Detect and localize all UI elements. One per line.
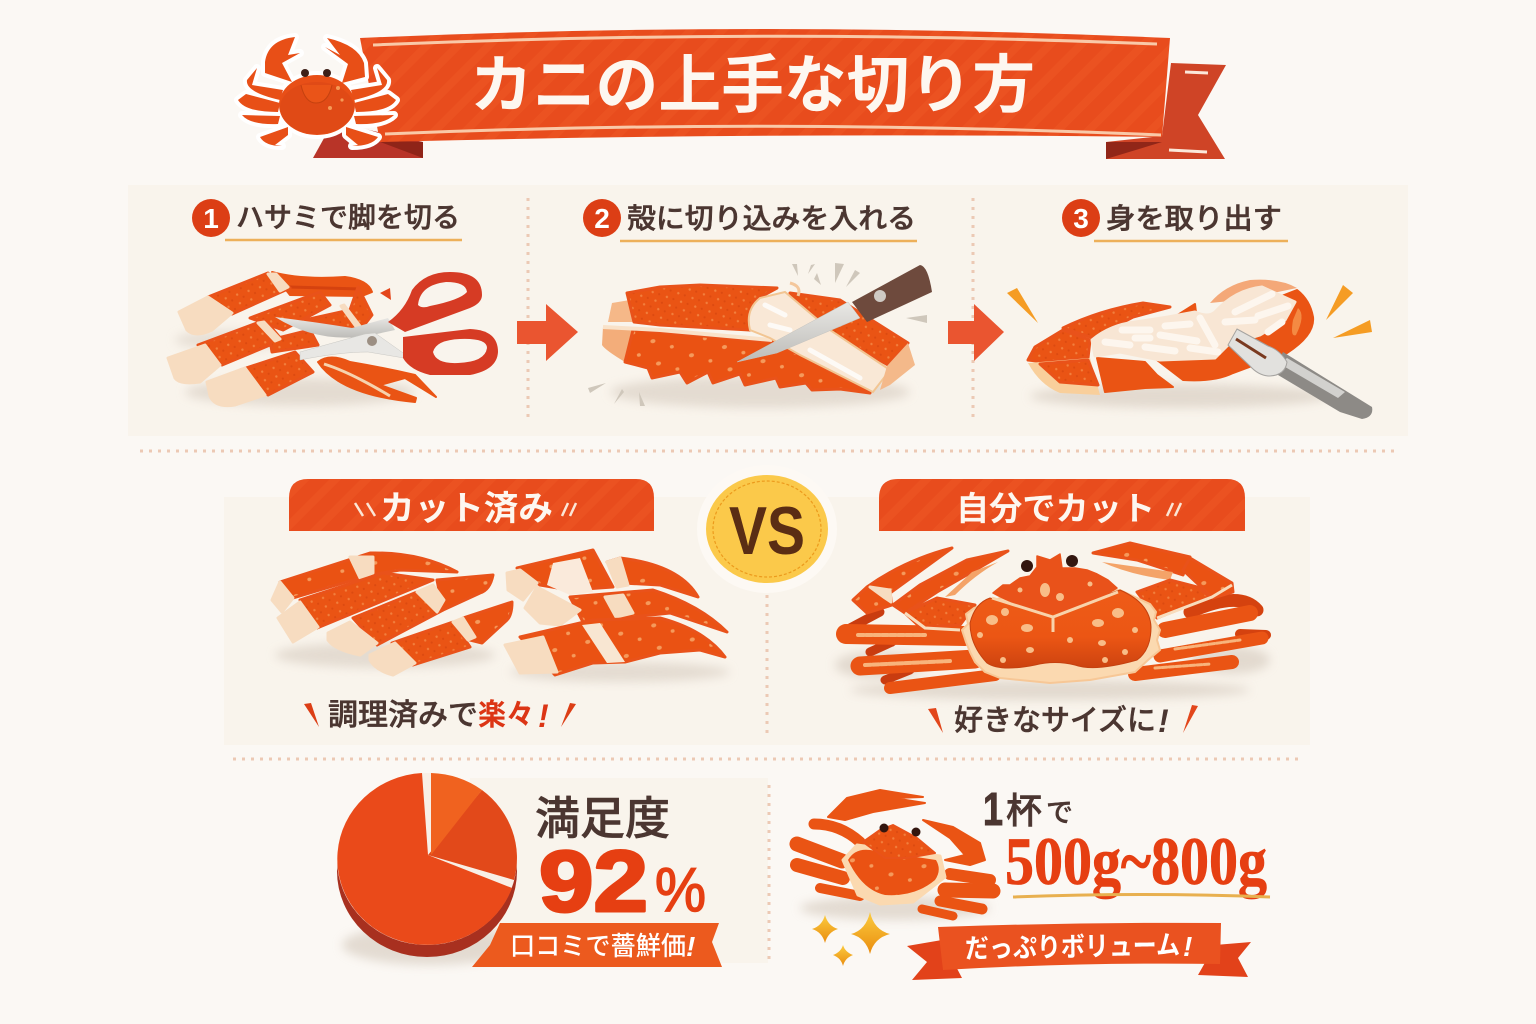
step 3 heading: 3 (1073, 203, 1089, 234)
title text: カニの上手な切り方 (470, 51, 1035, 121)
crab shell (962, 554, 1160, 683)
banner tail: left (313, 122, 423, 158)
panel: satisfaction stat (337, 773, 769, 967)
pie chart (337, 773, 518, 965)
ribbon: volume (907, 923, 1251, 980)
ribbon: reviews: 口コミで薔鮮価 (510, 931, 686, 961)
small crab body (843, 824, 945, 904)
VS badge (697, 465, 837, 593)
cut crab legs (168, 272, 436, 406)
per-crab label (983, 783, 1073, 835)
step 1 heading: ハサミで脚を切る (236, 202, 460, 233)
per-crab label: 杯 (1006, 790, 1042, 831)
satisfaction value (539, 834, 706, 930)
caption: pre-cut: 調理済みで (328, 699, 478, 732)
fork (1228, 329, 1372, 419)
header: pre-cut: カット済み (380, 490, 553, 528)
caption: pre-cut: 楽々 (478, 699, 534, 732)
illustration: cut legs (272, 550, 730, 682)
illustration: whole crab (835, 543, 1270, 700)
scored crab leg (602, 283, 915, 393)
arrow 1 (517, 304, 578, 361)
satisfaction value: % (655, 856, 706, 925)
per-crab label: で (1046, 798, 1073, 828)
panel: three steps (128, 185, 1408, 436)
caption: cut it yourself: 好きなサイズに (954, 704, 1156, 737)
panel: comparison (224, 465, 1310, 745)
scissors (275, 272, 498, 375)
header: pre-cut (289, 479, 654, 531)
ribbon: reviews: ! (686, 931, 695, 962)
step 3 heading (1062, 199, 1288, 241)
step 1 illustration: legs and scissors (168, 272, 498, 406)
impact marks (588, 263, 927, 406)
per-crab label: 1 (983, 783, 1003, 835)
icon: header crab (238, 37, 396, 146)
step 2 illustration: leg and knife (588, 263, 932, 408)
stat: volume per crab (907, 783, 1270, 980)
step 3 heading: 身を取り出す (1106, 203, 1282, 234)
step 2 heading: 殻に切り込みを入れる (627, 203, 916, 234)
banner ribbon (360, 29, 1170, 142)
arrow 2 (948, 304, 1004, 361)
caption: cut it yourself (928, 703, 1198, 739)
step 1 heading (192, 199, 462, 240)
satisfaction value: 92 (539, 834, 648, 930)
knife (737, 265, 932, 362)
ribbon: volume: ! (1183, 931, 1192, 962)
banner tail: right (1106, 63, 1226, 159)
header: cut it yourself (879, 479, 1245, 531)
title banner (313, 29, 1226, 159)
banner highlights (373, 36, 1161, 135)
caption: cut it yourself: ! (1158, 703, 1169, 739)
step 3 illustration: claw meat and fork (1007, 280, 1372, 419)
sparkle marks (1007, 285, 1372, 338)
sparkles (812, 912, 890, 966)
left group of legs (272, 553, 512, 675)
header: cut it yourself: 自分でカット (956, 490, 1155, 527)
satisfaction label: 満足度 (535, 793, 670, 844)
caption: pre-cut (304, 698, 576, 734)
VS badge: VS (729, 493, 805, 569)
ribbon: volume: だっぷりボリューム (965, 930, 1180, 964)
right group of legs (505, 550, 727, 675)
small crab legs (797, 790, 993, 916)
weight range: 500g~800g (1005, 823, 1267, 899)
caption: pre-cut: ! (538, 698, 549, 734)
crab meat (1092, 287, 1295, 360)
step 2 heading (583, 199, 917, 241)
step 2 heading: 2 (594, 203, 610, 234)
ribbon: reviews (472, 923, 722, 967)
crab legs (846, 543, 1266, 688)
illustration: small crab (797, 790, 993, 920)
step 1 heading: 1 (203, 203, 219, 234)
claw shell (1028, 280, 1313, 395)
